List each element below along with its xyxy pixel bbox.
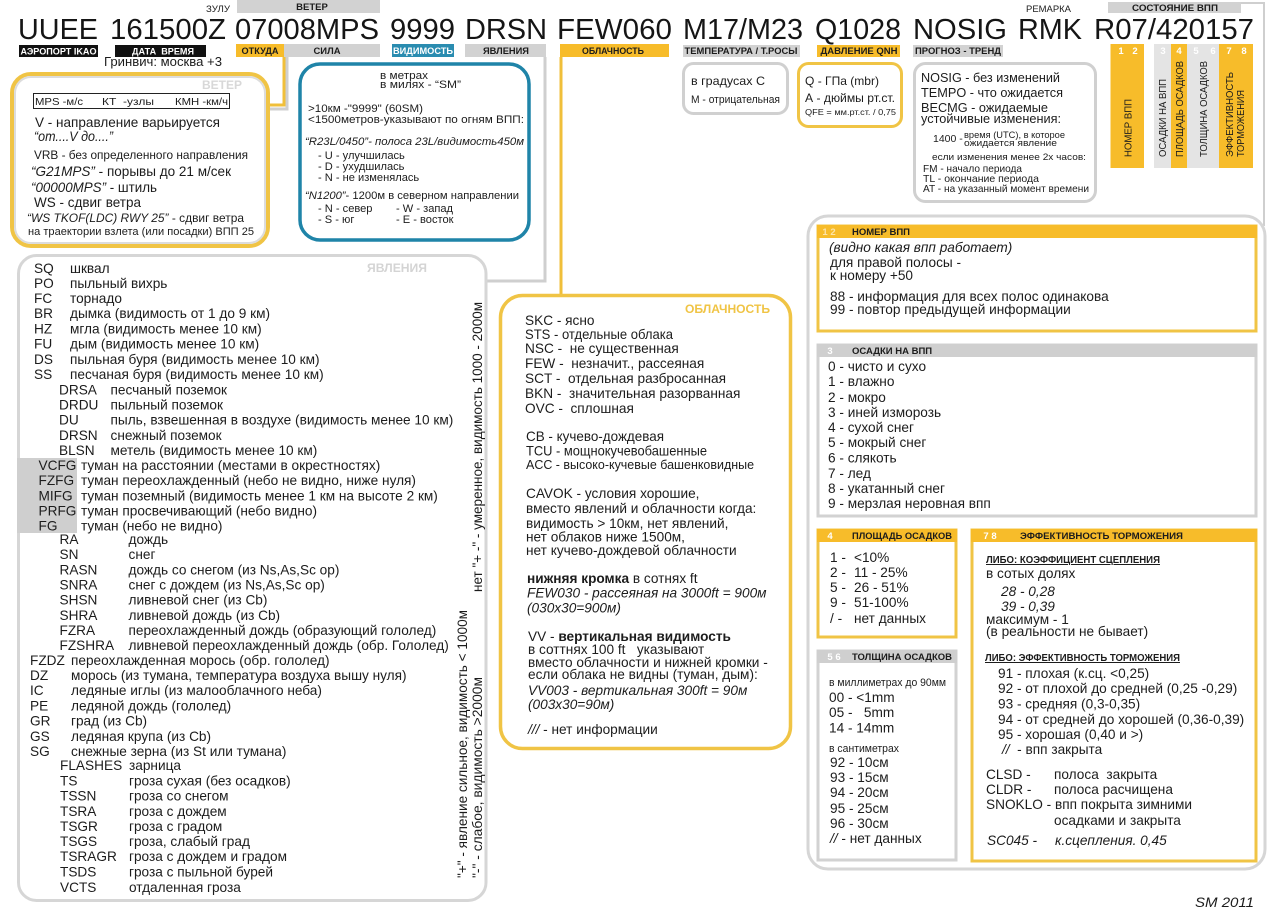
panel: runway number [817, 225, 1257, 331]
panel: runway number: 99 - повтор предыдущей информации [830, 302, 1071, 317]
panel: runway deposits: 3 [827, 346, 833, 357]
panel: wind: на траектории взлета (или посадки) ВПП 25 [28, 226, 254, 238]
panel: clouds: нижняя кромка в сотнях ft [527, 571, 698, 586]
panel: braking action: максимум - 1 [986, 612, 1069, 627]
panel: weather phenomena: зарница [129, 758, 181, 773]
runway state columns: ТОЛЩИНА ОСАДКОВ [1198, 61, 1210, 157]
panel: deposit depth: ТОЛЩИНА ОСАДКОВ [852, 652, 952, 663]
panel: clouds: нет кучево-дождевой облачности [526, 543, 737, 558]
panel: clouds: CB - кучево-дождевая [526, 429, 664, 444]
panel: clouds [500, 296, 790, 748]
panel: deposit area: 4 [827, 531, 833, 542]
labels under code: Гринвич: москва +3 [104, 54, 222, 69]
panel: braking action: 28 - 0,28 [1000, 584, 1055, 599]
panel: visibility: - N - север [318, 203, 372, 215]
panel: clouds: STS - отдельные облака [525, 327, 673, 342]
panel: weather phenomena: VCTS [60, 880, 96, 895]
runway state columns: 3 [1160, 46, 1166, 57]
panel: weather phenomena: SHRA [60, 608, 98, 623]
panel: temperature: М - отрицательная [691, 94, 780, 106]
panel: weather phenomena: туман на расстоянии (местами в окрестностях) [81, 458, 380, 473]
top annotations: СОСТОЯНИЕ ВПП [1132, 3, 1218, 14]
labels under code: ЯВЛЕНИЯ [483, 46, 529, 57]
METAR code line: R07/420157 [1094, 14, 1254, 46]
panel: runway number: (видно какая впп работает) [829, 240, 1012, 255]
panel: braking action: полоса расчищена [1054, 782, 1173, 797]
panel: weather phenomena: дым (видимость менее 10 км) [70, 336, 259, 352]
panel: wind [12, 74, 268, 246]
panel: visibility: - N - не изменялась [318, 172, 419, 184]
panel: weather phenomena: град (из Cb) [71, 714, 147, 728]
runway state columns: 2 [1132, 46, 1138, 57]
panel: weather phenomena: TSDS [60, 864, 96, 880]
panel: deposit area: / - [830, 611, 842, 626]
panel: weather phenomena: BR [34, 306, 53, 321]
panel: weather phenomena: GS [30, 729, 50, 744]
panel: weather phenomena: DRSN [59, 428, 98, 443]
panel: weather phenomena: гроза с пыльной бурей [129, 864, 273, 880]
panel: runway deposits [817, 344, 1257, 516]
panel: clouds: нет облаков ниже 1500м, [526, 530, 685, 544]
METAR code line: RMK [1018, 14, 1083, 46]
panel: weather phenomena: SN [60, 547, 78, 562]
panel: clouds: /// - нет информации [527, 722, 658, 737]
panel: clouds: FEW - незначит., рассеяная [525, 356, 704, 371]
panel: wind: “от....V до....” [34, 129, 114, 144]
runway state columns: ТОРМОЖЕНИЯ [1235, 90, 1247, 157]
panel: deposit depth: 93 - 15см [830, 770, 889, 785]
panel: weather phenomena: SG [30, 744, 50, 759]
panel: clouds: вместо явлений и облачности когда: [526, 501, 756, 516]
panel: runway deposits: 7 - лед [828, 466, 871, 481]
panel: runway deposits: 3 - иней изморозь [828, 405, 941, 420]
panel: weather phenomena: SS [34, 367, 52, 382]
panel: weather phenomena: ледяные иглы (из малооблачного неба) [71, 683, 322, 698]
panel: weather phenomena: гроза, слабый град [129, 834, 250, 849]
panel: wind: КМН -км/ч [175, 96, 228, 108]
panel: weather phenomena: FLASHES [60, 758, 122, 773]
panel: deposit area: 1 - [830, 550, 846, 565]
panel: clouds: CAVOK - условия хорошие, [526, 486, 699, 501]
labels under code: ОТКУДА [242, 46, 279, 57]
panel: braking action: полоса закрыта [1054, 767, 1158, 782]
panel: deposit depth: 92 - 10см [830, 755, 889, 770]
panel: weather phenomena: ливневой переохлажденный дождь (обр. Гололед) [128, 638, 449, 653]
panel: visibility [300, 64, 529, 240]
panel: weather phenomena: снежные зерна (из St или тумана) [71, 744, 286, 759]
panel: deposit area [817, 529, 957, 637]
panel: deposit area: 9 - [830, 595, 846, 610]
panel: deposit area: нет данных [854, 611, 926, 626]
panel: clouds: BKN - значительная разорванная [525, 386, 740, 401]
panel: runway deposits: 1 - влажно [828, 374, 895, 389]
panel: runway deposits: 2 - мокро [828, 390, 886, 405]
panel: runway number: НОМЕР ВПП [852, 227, 910, 238]
panel: trend: устойчивые изменения: [921, 111, 1061, 126]
panel: clouds: (030x30=900м) [527, 600, 621, 616]
panel: braking action: ЛИБО: КОЭФФИЦИЕНТ СЦЕПЛЕНИЯ [986, 555, 1160, 566]
panel: braking action: 91 - плохая (к.сц. <0,25) [998, 666, 1149, 681]
panel: weather phenomena: VCFG [38, 458, 76, 473]
panel: braking action: 39 - 0,39 [1001, 599, 1055, 614]
panel: weather phenomena: TSRAGR [60, 849, 117, 864]
panel: weather phenomena: FZSHRA [60, 638, 115, 653]
panel: weather phenomena: песчаный поземок [110, 382, 228, 398]
panel: braking action: к.сцепления. 0,45 [1055, 833, 1167, 848]
runway state columns: 7 [1226, 46, 1232, 57]
panel: wind: V - направление варьируется [35, 115, 220, 130]
panel: clouds: (003x30=90м) [528, 697, 614, 712]
METAR code line: M17/M23 [683, 14, 803, 46]
panel: weather phenomena: ливневой снег (из Cb) [128, 592, 267, 608]
panel: wind: “G21MPS” - порывы до 21 м/сек [31, 164, 232, 179]
panel: weather phenomena: дождь со снегом (из Ns,As,Sc ор) [128, 562, 339, 578]
panel: braking action: в сотых долях [986, 566, 1076, 581]
runway state columns: ЭФФЕКТИВНОСТЬ [1224, 72, 1236, 157]
panel: braking action: SNOKLO - [986, 797, 1051, 812]
panel: weather phenomena: DS [34, 352, 53, 367]
panel: clouds: видимость > 10км, нет явлений, [526, 516, 728, 531]
labels under code [19, 44, 1003, 69]
panel: trend: если изменения менее 2х часов: [932, 152, 1086, 163]
panel: weather phenomena: SHSN [60, 592, 97, 608]
panel: pressure: QFE = мм.рт.ст. / 0,75 [805, 107, 896, 117]
top annotations: РЕМАРКА [1026, 4, 1072, 15]
panel: deposit depth [817, 650, 957, 860]
panel: trend: BECMG - ожидаемые [921, 100, 1048, 115]
panel: weather phenomena: TSGS [60, 834, 97, 849]
panel: weather phenomena: метель (видимость менее 10 км) [110, 443, 317, 458]
METAR code line: Q1028 [815, 14, 901, 46]
panel: weather phenomena: туман поземный (видимость менее 1 км на высоте 2 км) [81, 488, 438, 504]
panel: weather phenomena: FZFG [38, 473, 74, 488]
panel: deposit depth: 00 - <1mm [829, 690, 895, 705]
runway state columns: ПЛОЩАДЬ ОСАДКОВ [1174, 61, 1186, 157]
panel: weather phenomena: PE [30, 698, 48, 714]
panel: trend [914, 64, 1096, 202]
METAR code line: DRSN [465, 14, 547, 46]
panel: deposit depth: 94 - 20см [830, 785, 889, 800]
panel: weather phenomena: ледяной дождь (гололед) [71, 698, 231, 714]
panel: braking action [971, 529, 1257, 861]
panel: deposit area: 2 - [830, 565, 846, 580]
panel: clouds: ОБЛАЧНОСТЬ [685, 302, 770, 316]
METAR code line: 07008MPS [235, 14, 379, 46]
panel: braking action: // - впп закрыта [1001, 742, 1103, 757]
panel: weather phenomena: переохлажденный дождь (образующий гололед) [128, 623, 436, 638]
panel: braking action: CLDR - [986, 782, 1031, 797]
panel: weather phenomena: SQ [34, 261, 54, 276]
panel: runway deposits: 9 - мерзлая неровная впп [828, 496, 991, 511]
panel: weather phenomena: DRSA [59, 382, 98, 398]
panel: visibility: - S - юг [318, 214, 354, 226]
labels under code: ПРОГНОЗ - ТРЕНД [915, 46, 1001, 57]
panel: weather phenomena: отдаленная гроза [129, 880, 241, 895]
panel: weather phenomena: FG [38, 518, 57, 534]
panel: deposit depth: 95 - 25см [830, 801, 889, 816]
panel: runway number: 88 - информация для всех полос одинакова [830, 289, 1109, 304]
panel: weather phenomena: FZDZ [30, 653, 65, 668]
panel: wind: “WS TKOF(LDC) RWY 25” - сдвиг ветра [27, 211, 244, 225]
panel: visibility: - E - восток [396, 214, 454, 226]
panel: trend: ожидается явление [964, 138, 1057, 148]
panel: runway deposits: ОСАДКИ НА ВПП [852, 346, 932, 357]
METAR code line: NOSIG [913, 14, 1007, 46]
panel: weather phenomena: MIFG [38, 488, 73, 504]
panel: wind: WS - сдвиг ветра [34, 195, 141, 210]
panel: trend: NOSIG - без изменений [921, 70, 1060, 85]
panel: trend: TEMPO - что ожидается [921, 85, 1063, 100]
panel: runway deposits: 6 - слякоть [828, 450, 897, 466]
panel: wind: VRB - без определенного направления [34, 148, 248, 162]
panel: braking action: CLSD - [986, 767, 1031, 782]
panel: clouds: VV - вертикальная видимость [528, 629, 731, 644]
panel: weather phenomena: пыльный поземок [110, 398, 224, 412]
panel: runway deposits: 5 - мокрый снег [828, 435, 926, 450]
connector lines [268, 3, 1264, 296]
top annotations: ВЕТЕР [296, 2, 328, 13]
panel: weather phenomena: нет "+ -" - умеренное, видимость 1000 - 2000м [470, 302, 485, 592]
panel: visibility: в метрах [380, 70, 428, 82]
panel: runway state container [808, 216, 1265, 869]
panel: wind: ВЕТЕР [202, 78, 242, 92]
panel: runway deposits: 0 - чисто и сухо [828, 359, 926, 374]
panel: weather phenomena: гроза с дождем [129, 804, 227, 819]
labels under code: ДАВЛЕНИЕ QNH [820, 46, 898, 57]
panel: clouds: вместо облачности и нижней кромки - [528, 655, 768, 670]
panel: wind: MPS -м/с [35, 96, 83, 108]
panel: clouds: TCU - мощнокучевобашенные [526, 444, 707, 458]
panel: runway number: к номеру +50 [830, 268, 913, 283]
panel: weather phenomena: TS [60, 774, 77, 788]
runway state columns [1110, 44, 1253, 168]
panel: clouds: если облака не видны (туман, дым): [528, 667, 758, 682]
panel: weather phenomena: ледяная крупа (из Cb) [71, 729, 211, 744]
panel: temperature [684, 64, 788, 114]
panel: deposit area: 5 - [830, 580, 846, 595]
panel: deposit area: 51-100% [854, 595, 909, 610]
panel: weather phenomena: морось (из тумана, температура воздуха вышу нуля) [71, 668, 407, 683]
panel: clouds: SCT - отдельная разбросанная [525, 371, 726, 386]
panel: weather phenomena: TSSN [60, 788, 96, 804]
panel: visibility: - W - запад [396, 203, 454, 215]
panel: weather phenomena: BLSN [59, 443, 95, 458]
panel: clouds: FEW030 - рассеяная на 3000ft = 900м [527, 586, 767, 600]
panel: clouds: в соттнях 100 ft указывают [528, 642, 705, 657]
panel: visibility: “R23L/0450”- полоса 23L/видимость450м [305, 136, 524, 148]
panel: weather phenomena: дымка (видимость от 1 до 9 км) [70, 306, 270, 321]
panel: runway number: для правой полосы - [830, 255, 961, 270]
panel: weather phenomena: DZ [30, 668, 48, 683]
panel: braking action: 93 - средняя (0,3-0,35) [998, 696, 1140, 712]
labels under code: СИЛА [314, 46, 341, 57]
runway state columns: 4 [1176, 46, 1182, 57]
panel: weather phenomena: HZ [34, 322, 52, 336]
panel: weather phenomena: "-" - слабое, видимость >2000м [470, 677, 485, 878]
panel: deposit area: 26 - 51% [854, 580, 909, 595]
panel: trend: AT - на указанный момент времени [923, 183, 1089, 195]
panel: weather phenomena: пыль, взвешенная в воздухе (видимость менее 10 км) [110, 412, 453, 428]
panel: visibility: <1500метров-указывают по огням ВПП: [308, 114, 524, 126]
panel: clouds: NSC - не существенная [525, 341, 679, 356]
panel: pressure: Q - ГПа (mbr) [805, 74, 879, 88]
panel: visibility: - U - улучшилась [318, 150, 405, 162]
panel: deposit depth: 96 - 30см [830, 816, 889, 831]
labels under code: ТЕМПЕРАТУРА / Т.РОСЫ [684, 46, 798, 57]
panel: braking action: впп покрыта зимними [1055, 797, 1192, 812]
labels under code: АЭРОПОРТ IKAO [20, 46, 96, 58]
panel: braking action: 95 - хорошая (0,40 и >) [998, 727, 1143, 742]
panel: weather phenomena: гроза со снегом [129, 788, 229, 804]
panel: wind: КТ -узлы [102, 96, 154, 108]
top annotations [206, 0, 1241, 15]
panel: weather phenomena: PO [34, 276, 54, 291]
panel: weather phenomena: FZRA [60, 623, 96, 638]
runway state columns: НОМЕР ВПП [1122, 99, 1134, 157]
panel: weather phenomena: DRDU [59, 398, 98, 412]
panel: weather phenomena: снег с дождем (из Ns,As,Sc ор) [128, 578, 325, 592]
panel: trend: 1400 - [933, 133, 963, 145]
panel: weather phenomena: TSGR [60, 819, 98, 834]
METAR code line: 9999 [390, 14, 455, 46]
panel: weather phenomena: торнадо [70, 291, 122, 306]
panel: weather phenomena: RA [60, 532, 79, 547]
panel: weather phenomena: переохлажденная морось (обр. гололед) [71, 653, 330, 668]
panel: braking action: 7 8 [983, 531, 997, 542]
panel: weather phenomena: мгла (видимость менее 10 км) [70, 322, 262, 336]
panel: braking action: SC045 - [987, 833, 1037, 848]
panel: pressure [798, 64, 902, 126]
panel: weather phenomena: ливневой дождь (из Cb) [128, 608, 280, 623]
panel: temperature: в градусах С [691, 74, 765, 88]
panel: braking action: (в реальности не бывает) [986, 624, 1148, 639]
panel: clouds: OVC - сплошная [525, 401, 634, 416]
panel: clouds: ACC - высоко-кучевые башенковидные [526, 457, 754, 472]
top annotations: ЗУЛУ [206, 4, 231, 15]
labels under code: ДАТА ВРЕМЯ [132, 46, 194, 58]
panel: braking action: ЭФФЕКТИВНОСТЬ ТОРМОЖЕНИЯ [1020, 531, 1183, 542]
runway state columns: 6 [1210, 46, 1216, 57]
panel: deposit depth: 05 - 5mm [829, 705, 894, 720]
panel: weather phenomena: FC [34, 291, 52, 306]
panel: weather phenomena: туман просвечивающий (небо видно) [81, 504, 317, 518]
labels under code: ОБЛАЧНОСТЬ [582, 46, 644, 57]
panel: deposit depth: // - нет данных [829, 831, 922, 846]
panel: weather phenomena: TSRA [60, 804, 97, 819]
panel: trend: TL - окончание периода [923, 173, 1039, 185]
panel: weather phenomena: дождь [128, 532, 168, 547]
panel: weather phenomena: песчаная буря (видимость менее 10 км) [70, 367, 324, 382]
panel: weather phenomena: ЯВЛЕНИЯ [367, 261, 427, 275]
panel: visibility: >10км -"9999" (60SM) [308, 103, 423, 115]
labels under code: ВИДИМОСТЬ [393, 46, 453, 57]
panel: clouds: SKC - ясно [525, 313, 595, 328]
panel: deposit depth: в сантиметрах [829, 743, 899, 755]
panel: braking action: 94 - от средней до хорошей (0,36-0,39) [998, 712, 1244, 727]
panel: weather phenomena: пыльная буря (видимость менее 10 км) [70, 352, 320, 367]
panel: weather phenomena [17, 256, 486, 900]
panel: trend: FM - начало периода [923, 163, 1022, 175]
panel: clouds: VV003 - вертикальная 300ft = 90м [528, 683, 748, 698]
panel: weather phenomena: DU [59, 412, 79, 428]
panel: runway deposits: 4 - сухой снег [828, 420, 914, 435]
METAR code line: FEW060 [557, 14, 672, 46]
panel: weather phenomena: шквал [70, 261, 110, 276]
panel: deposit area: <10% [854, 550, 889, 565]
runway state columns: 5 [1193, 46, 1199, 57]
runway state columns: 1 [1118, 46, 1124, 57]
METAR code line: 161500Z [110, 14, 226, 46]
panel: weather phenomena: "+" - явление сильное, видимость < 1000м [455, 610, 470, 878]
panel: deposit area: 11 - 25% [854, 565, 908, 580]
panel: weather phenomena: снег [128, 547, 155, 562]
panel: braking action: ЛИБО: ЭФФЕКТИВНОСТЬ ТОРМОЖЕНИЯ [985, 653, 1180, 664]
panel: weather phenomena: PRFG [38, 504, 76, 518]
panel: weather phenomena: гроза сухая (без осадков) [129, 774, 291, 788]
panel: weather phenomena: туман (небо не видно) [81, 518, 222, 534]
runway state columns: 8 [1241, 46, 1247, 57]
panel: visibility: в милях - “SM” [380, 79, 461, 91]
panel: deposit depth: 14 - 14mm [829, 720, 894, 736]
panel: weather phenomena: гроза с дождем и градом [129, 849, 287, 864]
panel: deposit area: ПЛОЩАДЬ ОСАДКОВ [852, 531, 952, 542]
panel: runway number: 1 2 [822, 227, 836, 238]
panel: weather phenomena: гроза с градом [129, 819, 222, 834]
panel: weather phenomena: снежный поземок [110, 428, 223, 443]
panel: weather phenomena: туман переохлажденный (небо не видно, ниже нуля) [81, 473, 416, 488]
panel: weather phenomena: пыльный вихрь [70, 276, 167, 291]
panel: weather phenomena: GR [30, 714, 51, 728]
panel: wind: “00000MPS” - штиль [31, 180, 157, 195]
panel: braking action: осадками и закрыта [1054, 813, 1181, 828]
panel: visibility: “N1200”- 1200м в северном направлении [305, 190, 519, 202]
panel: weather phenomena: IC [30, 683, 44, 698]
runway state columns: ОСАДКИ НА ВПП [1157, 79, 1169, 157]
panel: weather phenomena: FU [34, 336, 52, 352]
METAR code line: UUEE [18, 14, 98, 46]
panel: weather phenomena: RASN [60, 562, 97, 578]
panel: braking action: 92 - от плохой до средней (0,25 -0,29) [998, 681, 1237, 696]
METAR code line [18, 14, 1254, 46]
panel: weather phenomena: SNRA [60, 578, 98, 592]
panel: trend: время (UTC), в которое [964, 130, 1065, 140]
panel: runway deposits: 8 - укатанный снег [828, 481, 945, 496]
panel: visibility: - D - ухудшилась [318, 161, 405, 173]
panel: deposit depth: в миллиметрах до 90мм [829, 677, 946, 689]
panel: deposit depth: 5 6 [827, 652, 841, 663]
panel: pressure: А - дюймы рт.ст. [805, 91, 895, 105]
